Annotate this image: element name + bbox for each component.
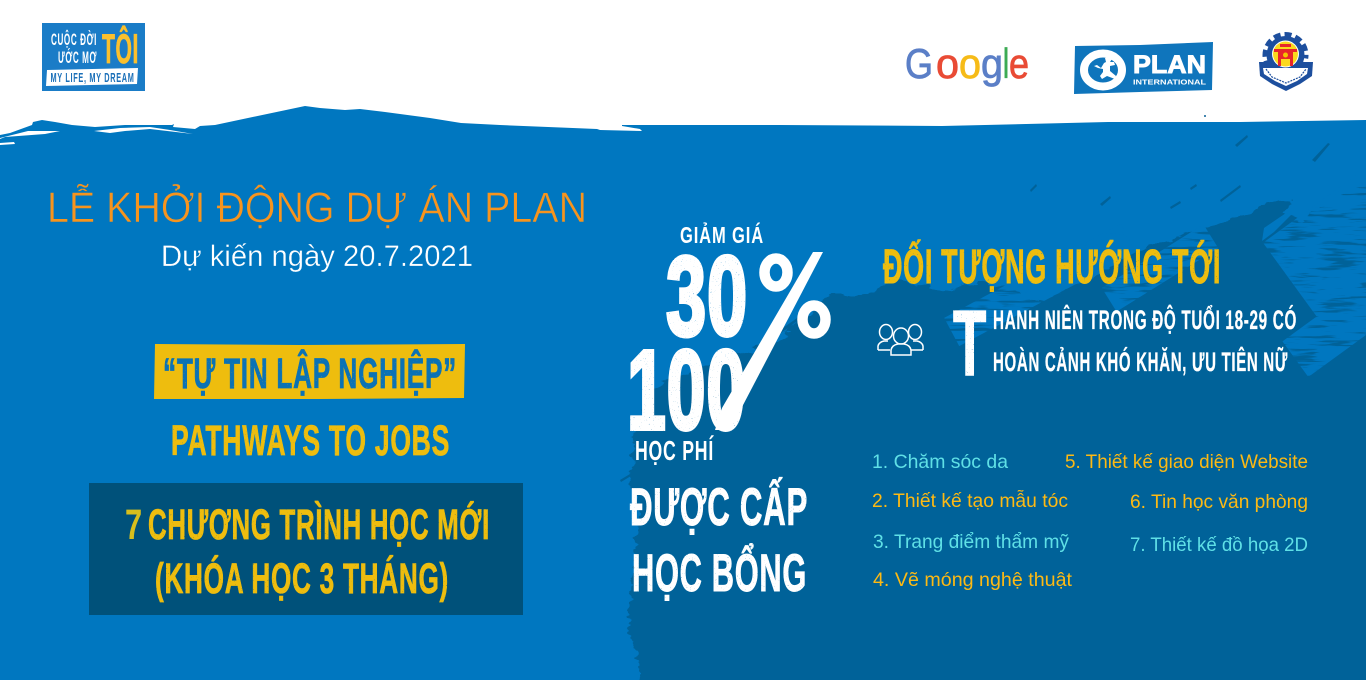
logo: Google: o — [936, 40, 959, 87]
logo: Google: l — [1003, 40, 1009, 87]
logo: Cuoc doi uoc mo toi: MY LIFE, MY DREAM — [50, 70, 134, 85]
logo: Google: o — [959, 40, 981, 87]
panel: scholarship discount: 30 — [666, 233, 748, 359]
panel: scholarship discount: HỌC PHÍ — [635, 435, 714, 466]
panel: seven new programs — [89, 483, 523, 615]
logo: Google: g — [981, 40, 1003, 87]
list: seven courses — [872, 451, 1308, 591]
list: seven courses: 2. Thiết kế tạo mẫu tóc — [872, 489, 1068, 512]
list: seven courses: 3. Trang điểm thẩm mỹ — [873, 531, 1069, 553]
panel: dark brush area lower right — [620, 135, 1366, 680]
panel: yellow tagline: “TỰ TIN LẬP NGHIỆP” — [163, 349, 457, 398]
percent sign — [715, 252, 826, 430]
logo: Cuoc doi uoc mo toi: ƯỚC MƠ — [58, 48, 97, 67]
text: target audience description — [953, 291, 1297, 395]
icon: group of people — [878, 324, 923, 355]
logo: Plan International: PLAN — [1133, 51, 1206, 79]
text: expected date: Dự kiến ngày 20.7.2021 — [161, 240, 473, 273]
panel: yellow tagline — [154, 344, 465, 399]
panel: seven new programs: (KHÓA HỌC 3 THÁNG) — [155, 554, 449, 603]
panel: scholarship discount: GIẢM GIÁ — [680, 220, 764, 248]
logo: Cuoc doi uoc mo toi — [42, 23, 145, 91]
panel: scholarship discount — [627, 220, 826, 603]
logo: Cuoc doi uoc mo toi: TÔI — [102, 24, 139, 72]
text: target audience description: T — [953, 291, 987, 395]
list: seven courses: 4. Vẽ móng nghệ thuật — [873, 569, 1073, 591]
panel: seven new programs: 7 — [125, 501, 143, 549]
list: seven courses: 6. Tin học văn phòng — [1130, 491, 1308, 513]
text: pathways to jobs: PATHWAYS TO JOBS — [171, 417, 450, 465]
list: seven courses: 7. Thiết kế đồ họa 2D — [1130, 534, 1308, 556]
panel: scholarship discount: 100 — [627, 327, 746, 453]
logo: Google: e — [1009, 40, 1029, 87]
logo: Google: G — [905, 40, 933, 87]
logo: Plan International: INTERNATIONAL — [1133, 78, 1206, 86]
panel: seven new programs: CHƯƠNG TRÌNH HỌC MỚI — [148, 500, 490, 549]
list: seven courses: 1. Chăm sóc da — [872, 451, 1008, 473]
panel: scholarship discount: HỌC BỔNG — [632, 543, 807, 603]
panel: scholarship discount: ĐƯỢC CẤP — [630, 477, 808, 537]
heading: project launch: LỄ KHỞI ĐỘNG DỰ ÁN PLAN — [47, 183, 587, 232]
list: seven courses: 5. Thiết kế giao diện Website — [1065, 451, 1308, 473]
logo: Plan International — [1074, 42, 1213, 94]
logo: Cuoc doi uoc mo toi: CUỘC ĐỜI — [51, 30, 97, 49]
logo: vocational college emblem — [1259, 34, 1313, 91]
logo: Google — [905, 40, 1029, 87]
